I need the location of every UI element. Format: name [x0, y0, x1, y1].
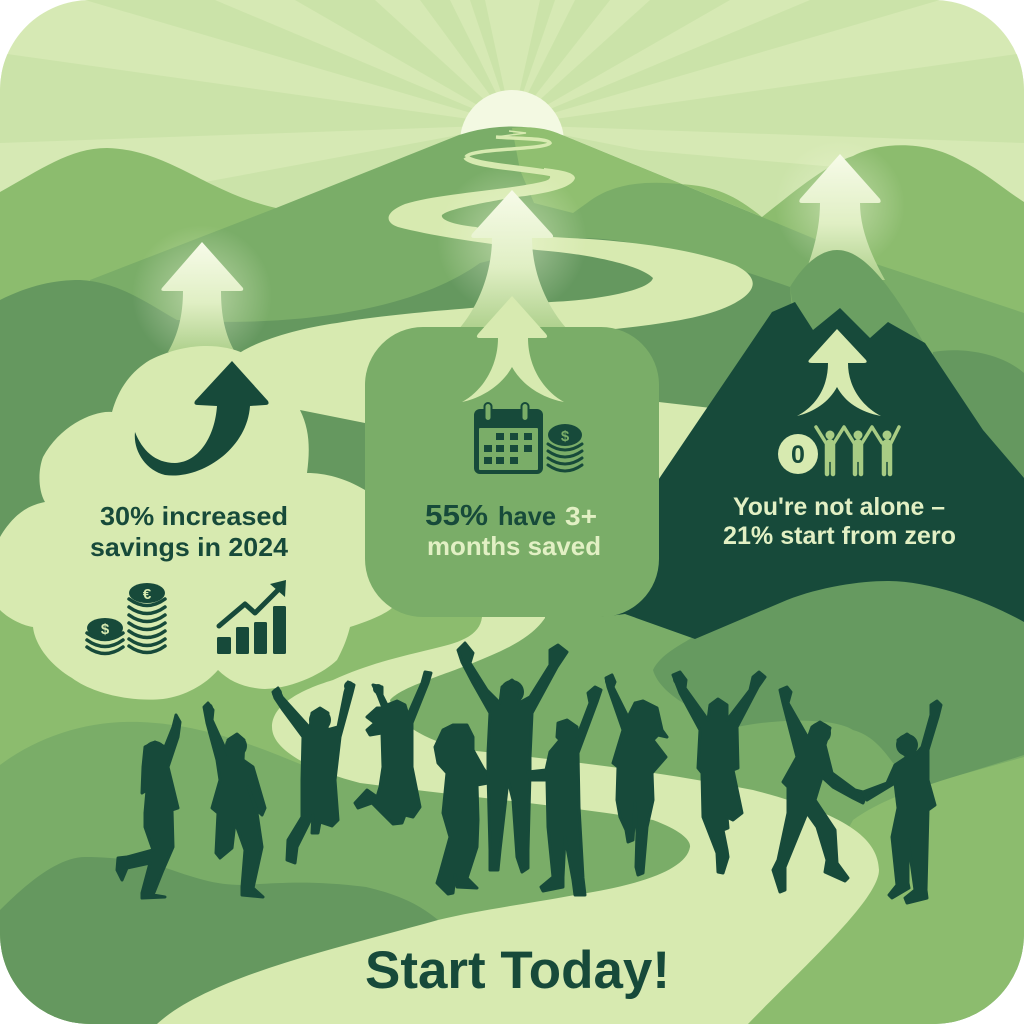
panel: mountain, 21% start from zero: [600, 302, 1024, 639]
text: you're not alone: [724, 497, 955, 544]
people: celebrating group: [117, 643, 941, 903]
icon: zero coin: 0: [791, 441, 805, 469]
text: 55% have 3+ months saved: [426, 504, 600, 556]
person 5: [435, 725, 490, 894]
sun: [460, 90, 564, 136]
person 3: [272, 681, 354, 863]
icon: coin stacks: €: [143, 586, 152, 603]
text: 55% have 3+ months saved: 3+: [565, 501, 597, 531]
winding road: upper section: [230, 131, 753, 490]
person 10: [773, 687, 867, 892]
hills: distant layers: [0, 126, 1024, 537]
icon: coin stacks: [87, 583, 165, 654]
winding road: lower section: [157, 610, 879, 1024]
ground: lower landscape: [0, 560, 1024, 1024]
arrow: glowing, centre: [447, 175, 577, 327]
text: you're not alone: 21% start from zero: [723, 522, 956, 550]
text: 30% increased savings in 2024: savings in 2024: [90, 532, 289, 562]
arrow: glowing, right: [784, 153, 896, 280]
icon: bar chart with rising line: [217, 580, 286, 654]
title: start today: Start Today!: [365, 941, 670, 1000]
person 7: [528, 687, 601, 895]
icon: coin stack: [548, 424, 582, 471]
icon: zero coin: [778, 434, 818, 474]
icon: arrow up: [462, 296, 564, 402]
icon: arrow up: [797, 329, 881, 416]
text: 55% have 3+ months saved: 55%: [425, 500, 488, 532]
arrow: glowing, left: [140, 235, 262, 352]
person 1: [117, 715, 180, 898]
icon: growth arrow: [135, 361, 269, 476]
text: 30% increased savings in 2024: [90, 501, 289, 562]
panel: 55% have 3+ months saved: [365, 296, 659, 617]
icon: three people cheering: [816, 427, 899, 474]
person 6: [458, 643, 567, 872]
person 8: [605, 675, 667, 875]
mountain back hump: [790, 250, 925, 350]
person 11: [863, 701, 941, 903]
person 4: [355, 672, 431, 824]
text: you're not alone: You're not alone –: [733, 493, 945, 521]
text: 55% have 3+ months saved: months saved: [427, 531, 601, 561]
text: 30% increased savings in 2024: 30% increased: [100, 501, 288, 531]
icon: coin stacks: $: [101, 621, 110, 638]
icon: calendar: [474, 403, 543, 474]
icon: coin stack: $: [561, 428, 570, 445]
background: sky with sun rays: [0, 0, 1024, 217]
person 2: [203, 703, 265, 897]
person 9: [673, 672, 765, 873]
text: 55% have 3+ months saved: have: [498, 501, 556, 531]
panel: cloud, 30% increased savings: [0, 346, 400, 700]
